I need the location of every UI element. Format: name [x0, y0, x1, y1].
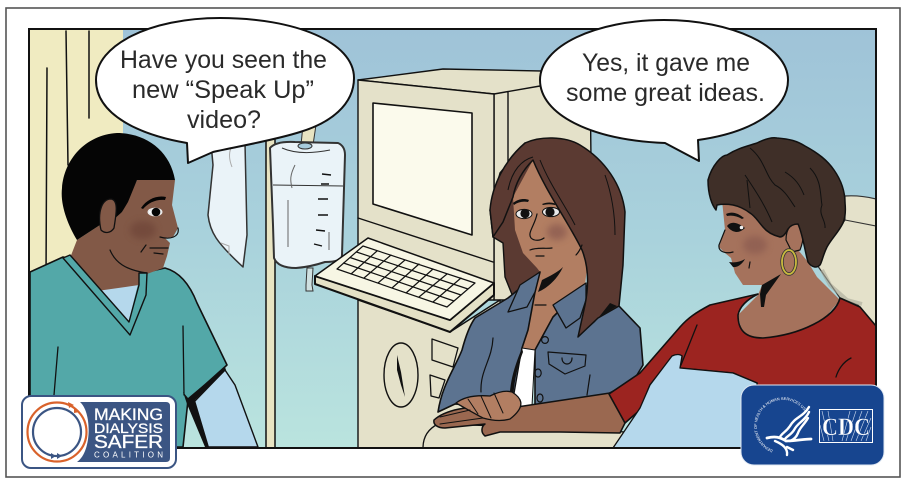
- face: [719, 200, 798, 285]
- hand on top: [456, 391, 521, 421]
- jacket details: [481, 337, 590, 402]
- speech bubble: nurse: video?: [187, 106, 261, 134]
- cheek: [743, 236, 767, 254]
- woman with long hair: [438, 138, 643, 412]
- back hair: [489, 142, 540, 294]
- dialysis machine: [358, 69, 591, 448]
- face: [513, 160, 588, 350]
- logo: Making Dialysis Safer Coalition: [22, 396, 176, 468]
- chair arm: [423, 424, 625, 448]
- full iv bag: [270, 125, 345, 291]
- logo wordmark: [94, 406, 163, 460]
- hhs eagle: [767, 407, 811, 455]
- hair: [708, 138, 845, 267]
- denim jacket: [438, 272, 643, 412]
- chair back: [815, 196, 876, 326]
- logo wordmark: MAKING: [94, 406, 163, 424]
- speech bubble: patient: some great ideas.: [566, 79, 765, 107]
- neck: [738, 251, 839, 338]
- machine panels: [430, 339, 458, 398]
- front hair: [490, 138, 625, 337]
- speech bubble: patient: [540, 20, 788, 161]
- patient forearm and hand: [434, 393, 625, 436]
- speech text: Yes, it gave me: [582, 49, 750, 77]
- undershirt sleeve: [194, 370, 258, 447]
- scrub top: [30, 257, 227, 447]
- ring icon: [28, 402, 86, 462]
- white shirt: [514, 348, 535, 406]
- speech bubble: nurse: new “Speak Up”: [132, 76, 314, 104]
- empty iv bag: [208, 143, 247, 267]
- machine dial: [384, 343, 418, 407]
- earring: [782, 250, 796, 274]
- ear: [100, 199, 116, 232]
- neck and face: [70, 180, 178, 291]
- speech text: Have you seen the: [120, 46, 327, 74]
- jacket collar: [508, 272, 586, 328]
- facial features: [719, 213, 750, 268]
- keyboard: [315, 238, 494, 332]
- hair: [62, 133, 175, 240]
- monitor screen: [373, 103, 472, 235]
- facial features: [110, 196, 178, 273]
- speech bubble: nurse: [96, 18, 354, 163]
- curtain: [30, 30, 123, 280]
- logo wordmark: SAFER: [94, 432, 163, 452]
- clasped hands: [434, 391, 625, 436]
- hhs seal text: DEPARTMENT OF HEALTH & HUMAN SERVICES USA: [754, 397, 806, 452]
- logo wordmark: COALITION: [94, 450, 163, 460]
- man in scrubs: [30, 133, 258, 447]
- collar: [63, 255, 147, 335]
- logo: HHS and CDC: [740, 384, 884, 466]
- machine base: [358, 300, 510, 448]
- ear: [786, 223, 803, 252]
- cheek: [132, 222, 154, 238]
- cdc mark: CDC: [822, 414, 870, 441]
- red shirt: [608, 293, 875, 424]
- patient in red top: [609, 138, 876, 448]
- undershirt: [102, 285, 138, 320]
- iv pole: [266, 30, 275, 447]
- facial features: [513, 199, 582, 305]
- blush: [547, 224, 567, 240]
- logo wordmark: DIALYSIS: [94, 421, 163, 436]
- blanket: [613, 354, 757, 448]
